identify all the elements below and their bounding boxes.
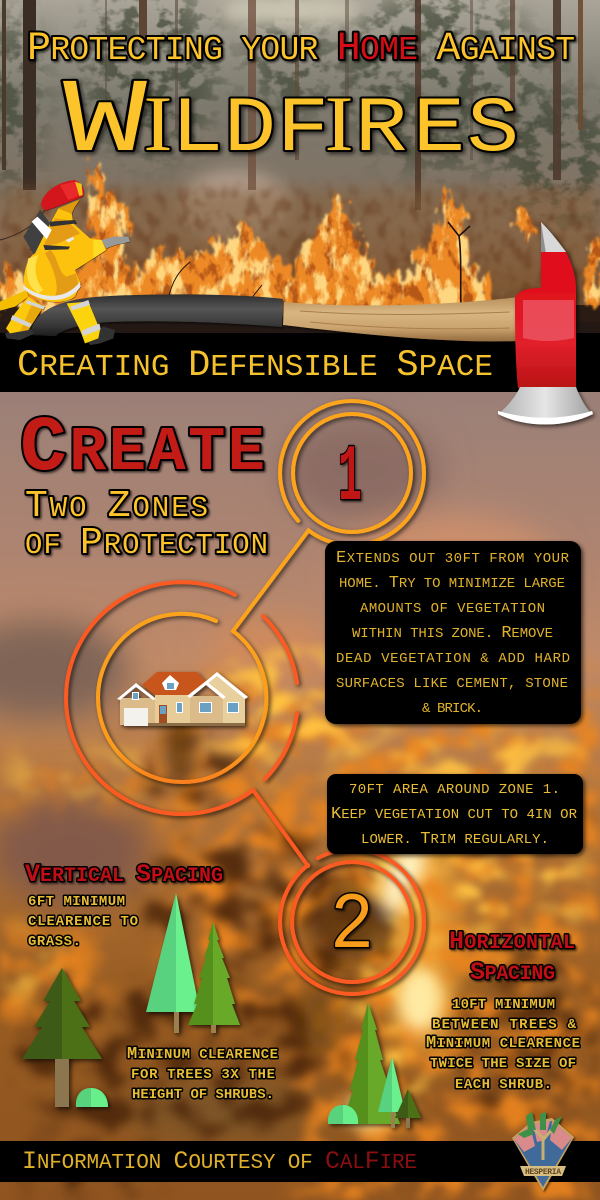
flames xyxy=(0,155,600,322)
title: wildfires: I xyxy=(324,80,354,167)
text: 1 xyxy=(338,433,362,524)
title: wildfires: L xyxy=(171,85,223,174)
callout: zone 1 description: AMOUNTS OF VEGETATION xyxy=(360,601,545,617)
text: horizontal spacing details xyxy=(426,997,580,1093)
callout: zone 1 description: & BRICK. xyxy=(422,701,483,717)
legs xyxy=(6,297,43,333)
text: horizontal spacing details: 10FT MINIMUM xyxy=(452,997,555,1013)
firefighter hose grip xyxy=(30,294,283,336)
torso xyxy=(24,208,106,302)
icon: serrated green tree xyxy=(188,922,240,1033)
text: tree clearance: HEIGHT OF SHRUBS. xyxy=(132,1087,274,1103)
text: horizontal spacing details: MINIMUM CLEARENCE xyxy=(426,1034,580,1053)
heading: two zones: TWO ZONES xyxy=(25,485,208,528)
diagram: zone 1 rings and pointer xyxy=(98,401,424,782)
text: grass clearance: 6FT MINIMUM xyxy=(28,894,125,910)
text: horizontal spacing details: EACH SHRUB. xyxy=(455,1077,552,1093)
icon: tree group with shrub xyxy=(328,1003,421,1128)
text: credit: INFORMATION COURTESY OF CALFIRE xyxy=(22,1147,417,1176)
axe head xyxy=(498,222,593,424)
subtitle: creating defensible space: CREATING DEFENSIBLE SPACE xyxy=(17,345,493,387)
axe handle xyxy=(283,297,520,342)
heading: of protection: OF PROTECTION xyxy=(25,522,268,565)
black band: defensible space xyxy=(0,333,600,392)
number 2: 2 xyxy=(330,881,374,972)
heading: horizontal spacing xyxy=(449,927,575,987)
hose xyxy=(0,290,28,311)
title: wildfires: E xyxy=(413,85,465,174)
title: wildfires: D xyxy=(224,85,276,174)
heading: vertical spacing: VERTICAL SPACING xyxy=(25,860,223,889)
logo: Hesperia seal: HESPERIA xyxy=(525,1168,561,1177)
heading: horizontal spacing: HORIZONTAL xyxy=(449,927,575,956)
callout: zone 1 description xyxy=(325,541,581,724)
title: wildfires: S xyxy=(467,85,519,174)
text: grass clearance: CLEARENCE TO xyxy=(28,914,138,930)
callout: zone 1 description: EXTENDS OUT 30FT FROM YOUR xyxy=(336,549,570,568)
callout: zone 1 description: HOME. TRY TO MINIMIZE LARGE xyxy=(339,574,565,593)
photo: blurred flames background xyxy=(0,392,600,1200)
title: wildfires: F xyxy=(277,85,329,174)
title: wildfires: I xyxy=(143,80,172,167)
callout: zone 1 description: DEAD VEGETATION & ADD HARD xyxy=(336,651,570,667)
air tank xyxy=(23,210,50,257)
title: wildfires xyxy=(63,63,519,182)
text: tree clearance: FOR TREES 3X THE xyxy=(131,1067,275,1083)
logo: Hesperia seal xyxy=(512,1112,574,1191)
boots xyxy=(5,327,115,345)
title: wildfires: W xyxy=(63,63,147,182)
text: grass clearance: GRASS. xyxy=(28,934,81,950)
callout: zone 2 description: KEEP VEGETATION CUT TO 4IN OR xyxy=(331,805,578,824)
callout: zone 2 description: 70FT AREA AROUND ZONE 1. xyxy=(349,782,560,798)
icon: dark tree with shrub xyxy=(22,968,108,1107)
heading: horizontal spacing: SPACING xyxy=(470,958,555,987)
title: wildfires: R xyxy=(355,85,407,174)
text: grass clearance xyxy=(28,894,138,950)
diagram: zone 2 rings and pointer xyxy=(66,582,424,994)
callout: zone 1 description: WITHIN THIS ZONE. REMOVE xyxy=(352,624,553,643)
photo: forest fire header background xyxy=(0,0,600,333)
heading: create: CREATE xyxy=(20,405,265,493)
callout: zone 1 description: SURFACES LIKE CEMENT, STONE xyxy=(336,676,568,692)
helmet xyxy=(58,199,80,213)
text: horizontal spacing details: BETWEEN TREES & xyxy=(432,1017,577,1033)
title line: protecting your home against: PROTECTING YOUR HOME AGAINST xyxy=(27,27,575,72)
icon: tall light tree xyxy=(146,893,200,1033)
text: horizontal spacing details: TWICE THE SIZE OF xyxy=(430,1056,576,1072)
icon: house xyxy=(117,672,248,726)
firefighter xyxy=(0,180,130,345)
text: tree clearance: MININUM CLEARENCE xyxy=(127,1045,278,1064)
callout: zone 2 description: LOWER. TRIM REGULARLY. xyxy=(361,830,549,849)
black band: footer xyxy=(0,1141,600,1182)
callout: zone 2 description xyxy=(327,774,583,854)
nozzle xyxy=(102,237,130,248)
text: tree clearance xyxy=(127,1045,278,1103)
